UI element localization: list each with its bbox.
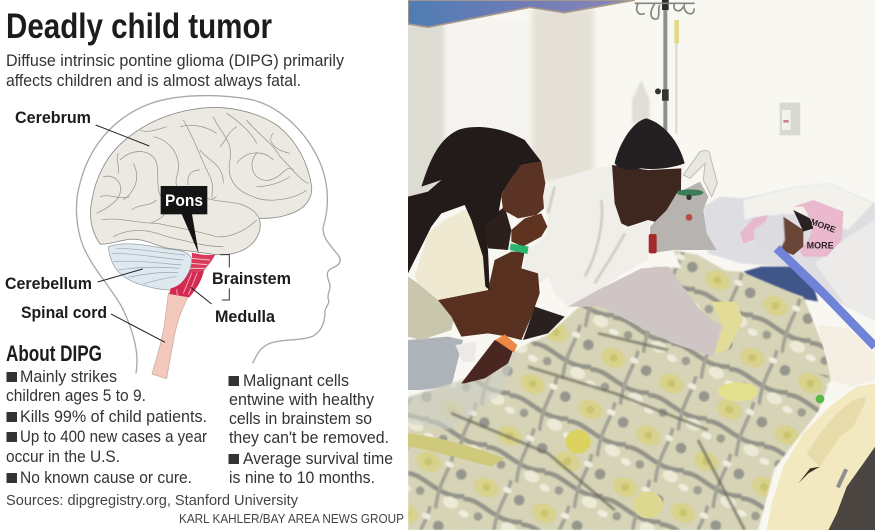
lower shirt: [408, 277, 455, 340]
orange wristband: [495, 334, 517, 353]
label: Cerebellum: Cerebellum: [5, 275, 92, 293]
floor and equipment: [828, 447, 875, 530]
label: Medulla: Medulla: [215, 308, 276, 326]
wall: [401, 0, 875, 530]
fact list: right column: Malignant cells: [243, 372, 349, 390]
baby: [740, 200, 843, 257]
pons pointer: [182, 214, 199, 253]
photo: family at hospital bedside: [408, 0, 875, 530]
oxygen mask: [753, 213, 785, 257]
fact list: left column: [6, 368, 207, 487]
label: Brainstem: Brainstem: [212, 270, 291, 288]
comforter: [408, 267, 831, 530]
ceiling border: [408, 0, 635, 27]
dark blue blanket: [743, 267, 818, 302]
dark gap under the arm: [523, 307, 565, 340]
green plush scrap: [816, 395, 824, 403]
hand: [511, 213, 547, 247]
green wristband: [510, 243, 529, 254]
shirt: [523, 165, 650, 307]
label: Pons: Pons: [165, 191, 203, 210]
fact list: left column: occur in the U.S.: [6, 448, 120, 466]
fact list: left column: No known cause or cure.: [20, 469, 192, 487]
beanie: [615, 118, 685, 170]
spinal cord: [152, 293, 188, 379]
fact list: left column: children ages 5 to 9.: [6, 387, 146, 405]
fact list: right column: they can't be removed.: [229, 429, 389, 447]
title: Deadly child tumor: [6, 7, 272, 46]
fact list: left column: Kills 99% of child patients.: [20, 408, 207, 426]
woman's lower arm and hand: [455, 334, 517, 383]
forearm: [438, 252, 540, 340]
woman: [408, 127, 547, 390]
face: [775, 217, 803, 255]
fact list: right column: Average survival time: [243, 450, 393, 468]
brain diagram: [76, 96, 340, 379]
plush toy: [649, 182, 717, 253]
brainstem: pons: [189, 253, 215, 273]
hat text: MORE: [809, 216, 837, 235]
hair: [408, 127, 541, 290]
lavender sheet: [568, 267, 722, 357]
shirt shading: [548, 187, 625, 283]
pillows and blankets: [703, 183, 875, 320]
sources: Sources: dipgregistry.org, Stanford University: [6, 493, 299, 509]
panel: infographic: [0, 0, 408, 530]
baby: MORE: [807, 240, 834, 250]
label: Cerebrum: Cerebrum: [15, 109, 91, 127]
yellow fold panel: [711, 302, 743, 353]
cerebrum: [90, 107, 312, 255]
leader lines: [96, 125, 212, 342]
label: Spinal cord: Spinal cord: [21, 304, 107, 322]
credit: KARL KAHLER/BAY AREA NEWS GROUP: [179, 512, 404, 526]
upper comforter fold: [673, 250, 835, 377]
fact list: left column: Mainly strikes: [20, 368, 117, 386]
hat right panel: [793, 200, 843, 257]
shirt: [415, 207, 488, 300]
bed rail: [767, 383, 875, 530]
cerebellum: [108, 244, 192, 290]
wall device: [780, 103, 800, 135]
hat left panel: [740, 215, 768, 243]
pants: [408, 337, 463, 390]
blue breathing tube: [777, 248, 875, 347]
bed mattress: [818, 325, 875, 387]
fact list: right column: entwine with healthy: [229, 391, 375, 409]
head outline: [76, 96, 340, 373]
face and neck: [612, 165, 681, 227]
bed headboard rail: [683, 151, 717, 197]
hair: [793, 210, 813, 232]
man: [523, 118, 685, 307]
fact list: right column: cells in brainstem so: [229, 410, 372, 428]
brainstem bracket: [220, 255, 229, 300]
intro text: Diffuse intrinsic pontine glioma (DIPG) primarily: [6, 52, 345, 70]
plastic cup: [455, 342, 476, 362]
fact list: left column: Up to 400 new cases a year: [20, 428, 207, 446]
IV pole: [632, 0, 695, 133]
intro text: affects children and is almost always fatal.: [6, 72, 301, 90]
fact list: right column: is nine to 10 months.: [229, 469, 375, 487]
neck: [483, 207, 511, 250]
pons label box: [161, 186, 207, 214]
brainstem: medulla: [169, 271, 204, 297]
intro text: [6, 52, 345, 90]
fact list: right column: [228, 372, 393, 487]
heading: About DIPG: About DIPG: [6, 341, 102, 366]
face: [501, 162, 545, 218]
